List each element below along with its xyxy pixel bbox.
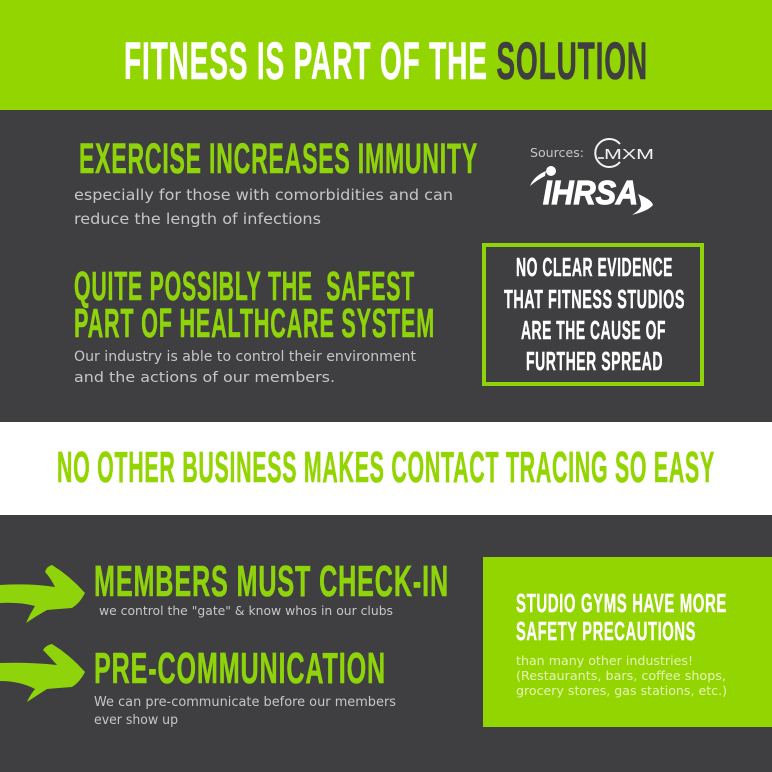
section: members must check-in: MEMBERS MUST CHECK-IN xyxy=(94,557,449,606)
sources logos xyxy=(530,139,654,215)
section: exercise increases immunity: especially for those with comorbidities and can xyxy=(74,186,453,204)
section: members must check-in xyxy=(94,557,449,618)
panel: studio gyms: grocery stores, gas stations, etc.) xyxy=(516,684,727,698)
arrow: pre-communication xyxy=(0,644,85,702)
panel: studio gyms: (Restaurants, bars, coffee shops, xyxy=(516,669,726,683)
section: pre-communication: PRE-COMMUNICATION xyxy=(94,644,386,693)
section: safest part of healthcare: PART OF HEALTHCARE SYSTEM xyxy=(74,300,435,346)
section: pre-communication: We can pre-communicate before our members xyxy=(94,695,396,710)
logo: IHRSA: IHRSA xyxy=(543,174,638,211)
title banner xyxy=(0,0,772,110)
section: exercise increases immunity xyxy=(74,135,478,228)
sources logos: Sources: xyxy=(530,145,584,160)
panel: studio gyms: than many other industries! xyxy=(516,654,693,668)
callout: no clear evidence xyxy=(484,245,702,384)
section: pre-communication xyxy=(94,644,396,728)
panel: studio gyms xyxy=(483,557,772,727)
logo: MXM: MXM xyxy=(604,146,654,163)
white band: contact tracing xyxy=(0,422,772,515)
section: safest part of healthcare: QUITE POSSIBLY THE SAFEST xyxy=(74,263,415,309)
section: members must check-in: we control the "gate" & know whos in our clubs xyxy=(99,603,393,618)
section: safest part of healthcare xyxy=(74,263,435,386)
arrow: members check-in xyxy=(0,565,85,623)
section: safest part of healthcare: Our industry is able to control their environment xyxy=(74,349,417,365)
section: safest part of healthcare: and the actions of our members. xyxy=(74,370,335,386)
section: exercise increases immunity: reduce the length of infections xyxy=(74,210,321,228)
section: pre-communication: ever show up xyxy=(94,713,178,728)
